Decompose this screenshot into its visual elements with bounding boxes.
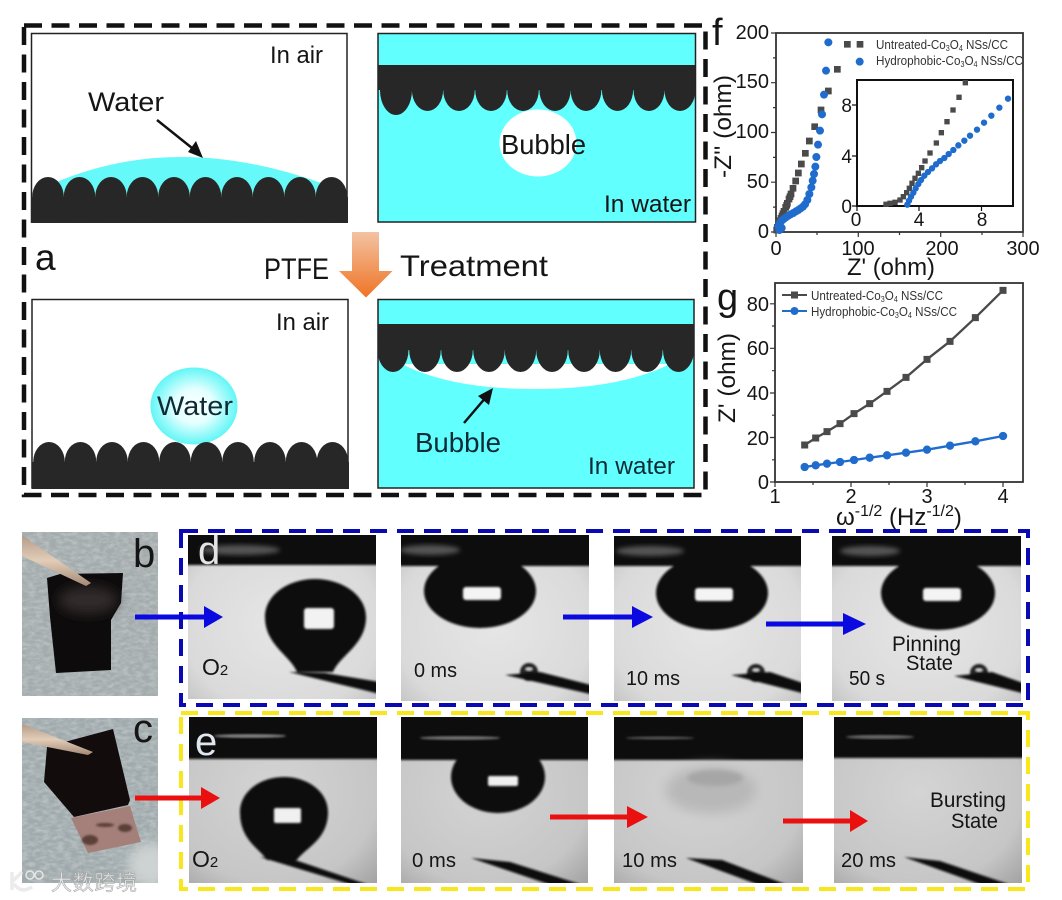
arrow: to bubble film [464, 388, 493, 423]
y axis title: Z' (ohm) [714, 333, 741, 423]
legend: hydrophobic: O [964, 53, 974, 68]
inset tick labels: 0 [841, 197, 852, 218]
x axis title: Z' (ohm) [847, 254, 935, 281]
legend: hydrophobic: O [899, 304, 908, 319]
y tick labels: 20 [747, 428, 769, 450]
y tick labels: 100 [736, 121, 769, 143]
legend: hydrophobic: 3 [960, 60, 965, 69]
group e: bursting state sequence [181, 712, 1028, 889]
x tick labels [770, 238, 1040, 260]
inset tick labels: 4 [841, 147, 852, 168]
label: In air: In air [276, 309, 329, 336]
label: panel d: d [198, 529, 220, 573]
inset untreated squares [886, 83, 965, 204]
legend: untreated: 3 [881, 295, 885, 304]
plot frame [775, 283, 1023, 482]
legend: hydrophobic: 3 [895, 311, 899, 320]
legend: untreated: NSs/CC [963, 37, 1008, 52]
arrow: blue d3 to d4 [766, 613, 866, 635]
watermark [12, 871, 137, 895]
bubble film [402, 364, 670, 389]
bubble [500, 110, 576, 176]
water droplet [150, 368, 238, 444]
panel a: schematic of wetting states [24, 26, 706, 495]
label: Bubble: Bubble [415, 427, 501, 458]
y axis title: -Z'' (ohm) [710, 75, 737, 178]
photo c: treated cloth [22, 718, 158, 883]
inset tick labels: 0 [851, 210, 861, 231]
label: panel a: a [35, 237, 56, 278]
x tick labels: 3 [921, 486, 933, 508]
legend: untreated: 4 [894, 295, 898, 304]
y tick labels: 40 [747, 383, 769, 405]
rough surface [31, 177, 348, 223]
x tick labels: 1 [769, 486, 781, 508]
x tick labels: 2 [845, 486, 857, 508]
x tick labels [769, 486, 1009, 508]
label: Treatment: Treatment [400, 250, 549, 283]
label: 10 ms: 10 ms [626, 668, 680, 690]
legend: untreated: 4 [959, 44, 963, 53]
arrow: to water film [157, 120, 203, 158]
label: 10 ms: 10 ms [622, 850, 677, 872]
y tick labels: 150 [736, 71, 769, 93]
water film [52, 157, 324, 200]
schematic: untreated in air [31, 34, 348, 223]
plot frame [776, 33, 1023, 232]
label: In water: In water [588, 453, 675, 480]
untreated data squares [777, 44, 860, 230]
photo d1 [188, 535, 376, 699]
arrow: blue d2 to d3 [563, 606, 653, 628]
photo e2 [401, 717, 588, 883]
label: Bursting State: State [951, 810, 998, 833]
photo e3 [614, 717, 803, 883]
x tick labels: 300 [1006, 238, 1040, 260]
series: untreated [805, 290, 1003, 445]
label: Bursting State: Bursting [930, 789, 1006, 812]
inset tick labels: 8 [977, 210, 987, 231]
axis ticks [771, 33, 1023, 237]
x axis title: -1/2 [926, 503, 954, 520]
legend: untreated: O [950, 37, 959, 52]
label: In air: In air [270, 42, 323, 69]
axis ticks [770, 304, 1003, 487]
legend: untreated: Untreated-Co [876, 37, 954, 52]
y tick labels [736, 22, 769, 243]
rough surface [32, 442, 349, 489]
group d: pinning state sequence [180, 529, 1028, 705]
inset tick labels [841, 96, 987, 231]
legend: hydrophobic: 4 [974, 60, 978, 69]
legend: hydrophobic [782, 304, 957, 320]
schematic: untreated in water [378, 34, 696, 222]
label: 50 s: 50 s [849, 668, 885, 690]
label: 0 ms: 0 ms [412, 850, 456, 872]
label: Pinning State: State [906, 652, 953, 675]
label: panel e: e [195, 720, 217, 764]
label: O2: O2 [192, 846, 218, 872]
photo e1 [189, 717, 377, 883]
y tick labels: 50 [747, 171, 769, 193]
label: In water: In water [604, 191, 691, 218]
rough surface with bubble [378, 65, 696, 115]
inset tick labels: 8 [841, 96, 852, 117]
arrow: red e3 to e4 [783, 810, 868, 832]
y tick labels: 0 [758, 472, 769, 494]
label: 0 ms: 0 ms [414, 660, 457, 682]
inset tick labels: 4 [914, 210, 925, 231]
photo e4 [834, 717, 1022, 883]
y tick labels [747, 294, 769, 494]
legend: hydrophobic: NSs/CC [978, 53, 1023, 68]
dashed yellow frame [181, 713, 1028, 889]
legend: untreated [782, 288, 943, 304]
inset hydrophobic circles [907, 99, 1008, 205]
dashed frame for panel a [24, 26, 706, 495]
inset chart [841, 80, 1013, 231]
x tick labels: 100 [841, 238, 875, 260]
legend: hydrophobic: Hydrophobic-Co [811, 304, 905, 319]
dashed blue frame [181, 531, 1028, 705]
label: Bubble: Bubble [501, 129, 586, 160]
label: PTFE: PTFE [264, 253, 329, 286]
legend: untreated: O [885, 288, 894, 303]
watermark text: 大数跨境 [51, 872, 137, 895]
series: hydrophobic [805, 436, 1003, 467]
arrow: blue b to d [135, 606, 223, 628]
photo d3 [614, 536, 801, 701]
x axis title: ω [836, 504, 855, 531]
y tick labels: 0 [758, 221, 769, 243]
legend: hydrophobic: Hydrophobic-Co [876, 53, 970, 68]
legend: hydrophobic: NSs/CC [912, 304, 957, 319]
chart g: Warburg plot [714, 277, 1023, 531]
x axis title: (Hz [882, 504, 926, 531]
watermark logo [12, 871, 43, 890]
legend: untreated: NSs/CC [898, 288, 943, 303]
label: Pinning State [892, 633, 961, 675]
label: 20 ms: 20 ms [841, 850, 896, 872]
hydrophobic data circles [778, 42, 860, 230]
y tick labels: 60 [747, 338, 769, 360]
label: Pinning State: Pinning [892, 633, 961, 656]
label: Bursting State [930, 789, 1006, 833]
photo d2 [401, 535, 589, 701]
legend: untreated: 3 [946, 44, 950, 53]
legend: hydrophobic: 4 [908, 311, 912, 320]
y tick labels: 80 [747, 294, 769, 316]
label: panel f: f [712, 12, 723, 54]
chart f: Nyquist plot [710, 12, 1040, 281]
schematic: treated in air [32, 300, 349, 489]
label: O2: O2 [202, 654, 228, 680]
inset ticks [852, 105, 982, 211]
rough surface [378, 324, 694, 372]
x axis title: ) [954, 504, 962, 531]
x tick labels: 4 [997, 486, 1009, 508]
legend: untreated: Untreated-Co [811, 288, 889, 303]
label: Water: Water [88, 87, 164, 117]
label: panel b: b [133, 532, 155, 576]
arrow: red e2 to e3 [550, 806, 648, 828]
x tick labels: 0 [770, 238, 782, 260]
y tick labels: 200 [736, 22, 769, 44]
photo d4 [832, 536, 1021, 701]
x axis title: -1/2 [855, 503, 882, 520]
label: panel c: c [133, 707, 153, 751]
label: panel g: g [717, 277, 738, 319]
label: Water: Water [157, 391, 233, 421]
photo b: untreated cloth [22, 532, 158, 696]
arrow: red c to e [135, 787, 220, 809]
x tick labels: 200 [925, 238, 959, 260]
schematic: treated in water [378, 300, 694, 488]
arrow: PTFE treatment [339, 232, 392, 298]
